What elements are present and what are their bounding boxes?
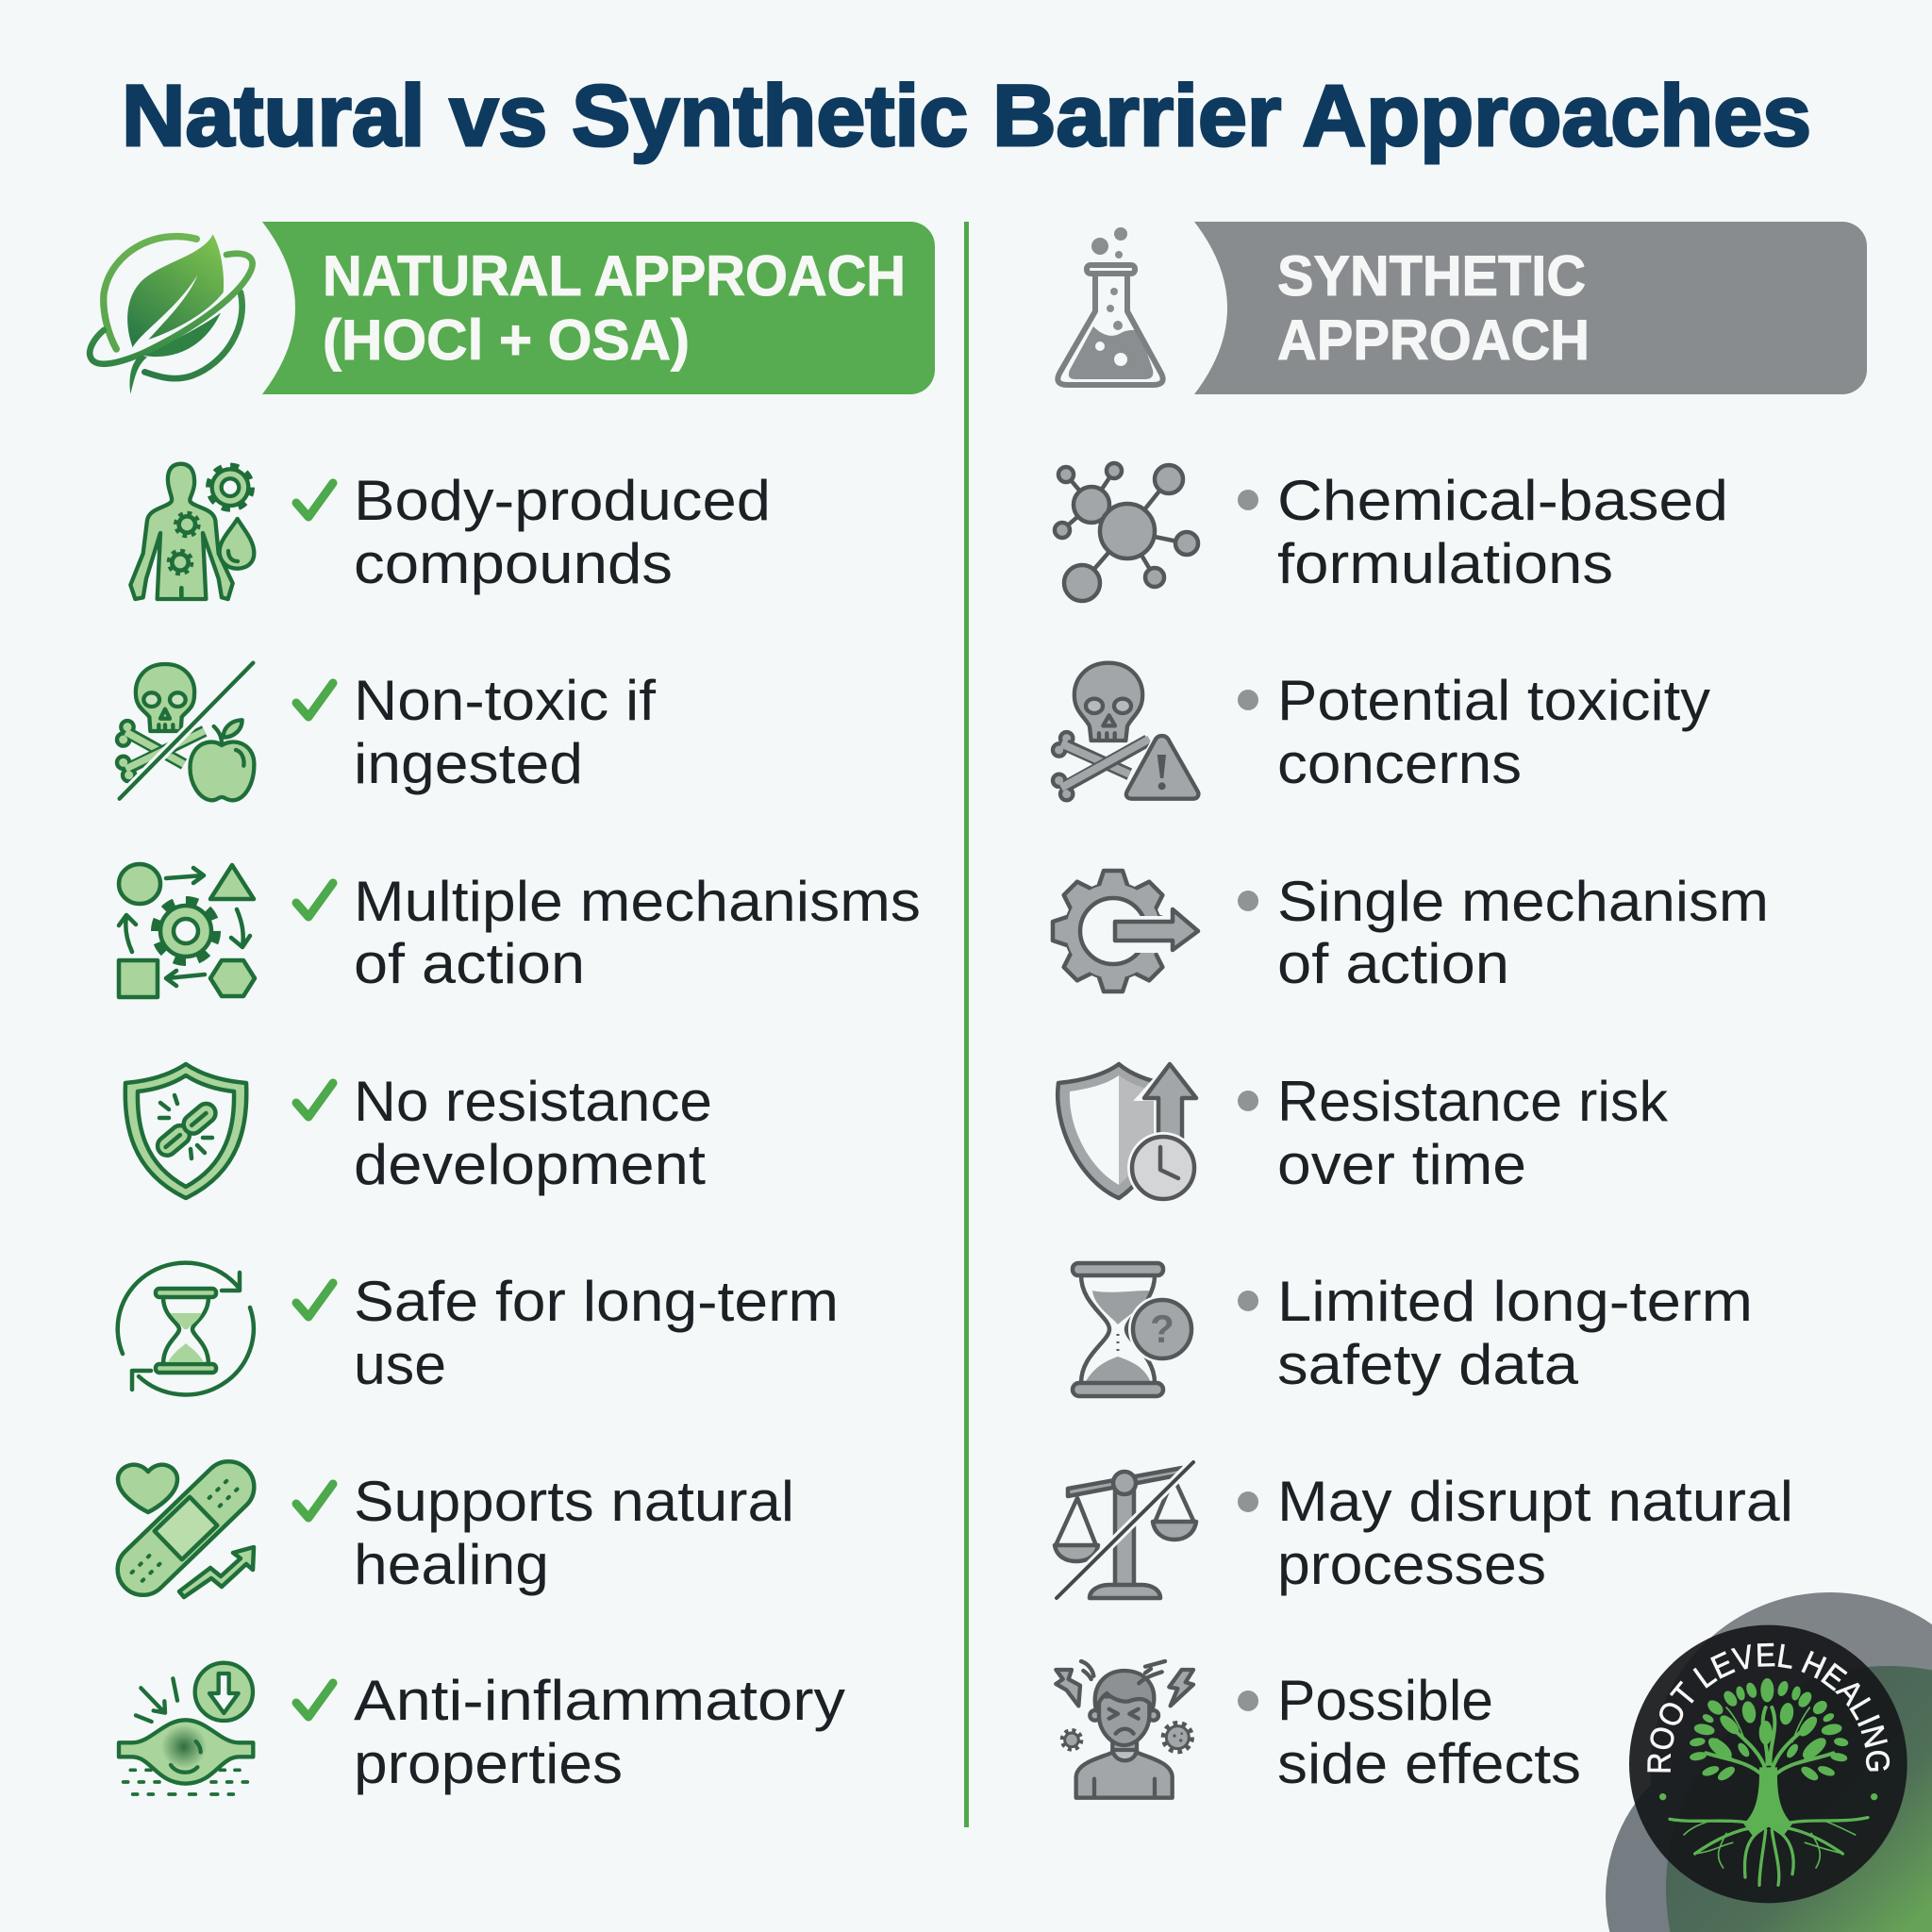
text	[1277, 669, 1710, 795]
check	[296, 1283, 333, 1317]
text	[1277, 870, 1769, 995]
bullet	[1238, 1091, 1258, 1111]
bullet	[1238, 1491, 1258, 1512]
row: limited data	[1073, 1263, 1753, 1396]
text: healing	[354, 1533, 549, 1596]
text: concerns	[1277, 732, 1522, 795]
text	[354, 669, 656, 795]
icon: shield broken link	[125, 1064, 246, 1198]
bullet	[1238, 490, 1258, 510]
text	[354, 870, 921, 995]
natural banner heading	[323, 244, 906, 372]
row: resistance risk	[1058, 1064, 1669, 1204]
synthetic banner heading: APPROACH	[1277, 308, 1590, 372]
natural banner heading: (HOCl + OSA)	[323, 308, 690, 372]
icon: hourglass question: ?	[1150, 1307, 1174, 1351]
text	[1277, 1070, 1669, 1196]
row: body-produced	[130, 464, 771, 599]
text: development	[354, 1133, 706, 1196]
text: side effects	[1277, 1732, 1581, 1795]
text: compounds	[354, 532, 673, 595]
check	[296, 1683, 333, 1717]
icon: gear with arrow	[1053, 871, 1198, 991]
icon: crossed skull and apple	[117, 663, 254, 800]
check	[296, 883, 333, 917]
row: chemical-based	[1055, 463, 1728, 601]
icon: leaf logo	[90, 234, 253, 394]
row: non-toxic	[117, 663, 656, 800]
icon: bandage heart arrow	[108, 1451, 264, 1606]
check	[296, 1083, 333, 1117]
icon: hourglass in cycle	[118, 1263, 254, 1394]
check	[296, 683, 333, 717]
bullet	[1238, 690, 1258, 710]
logo: root level healing	[1629, 1624, 1907, 1904]
row: safe long-term	[118, 1263, 839, 1396]
text: May disrupt natural	[1277, 1470, 1793, 1533]
icon: crossed scales	[1055, 1462, 1196, 1598]
text: Non-toxic if	[354, 669, 656, 732]
row: multiple mechanisms	[119, 864, 921, 997]
text	[354, 1070, 712, 1196]
panel: synthetic list	[1053, 463, 1793, 1798]
bullet	[1238, 1690, 1258, 1711]
text: properties	[354, 1732, 623, 1795]
logo tree	[1670, 1679, 1868, 1885]
title: Natural vs Synthetic Barrier Approaches	[122, 68, 1811, 164]
row: single mechanism	[1053, 870, 1769, 995]
panel: natural approach header	[90, 222, 935, 394]
text: Possible	[1277, 1669, 1493, 1732]
text: Multiple mechanisms	[354, 870, 921, 933]
text: Body-produced	[354, 469, 771, 532]
icon: shapes and gear cycle	[119, 864, 255, 997]
check	[296, 483, 333, 517]
text: Safe for long-term	[354, 1270, 839, 1333]
icon: hourglass question	[1073, 1263, 1196, 1396]
text	[1277, 1470, 1793, 1596]
bullet	[1238, 1291, 1258, 1311]
check	[296, 1484, 333, 1518]
synthetic banner heading	[1277, 244, 1590, 372]
synthetic banner	[1194, 222, 1867, 394]
text: Chemical-based	[1277, 469, 1728, 532]
row: disrupt processes	[1055, 1462, 1793, 1598]
text: processes	[1277, 1533, 1546, 1596]
icon: skull warning	[1053, 663, 1198, 800]
natural banner	[262, 222, 935, 394]
text: Single mechanism	[1277, 870, 1769, 933]
panel: natural list	[108, 464, 921, 1795]
text: of action	[1277, 932, 1509, 995]
text	[354, 1470, 794, 1596]
text: over time	[1277, 1133, 1526, 1196]
row: no resistance	[125, 1064, 712, 1198]
text	[1277, 469, 1728, 595]
text	[354, 1669, 845, 1795]
icon: reduced swelling	[119, 1663, 253, 1794]
icon: body with gears	[130, 464, 254, 599]
text: Limited long-term	[1277, 1270, 1753, 1333]
icon: flask	[1058, 227, 1163, 385]
icon: stressed person	[1056, 1661, 1193, 1798]
text	[1277, 1669, 1581, 1795]
text: No resistance	[354, 1070, 712, 1133]
text	[354, 469, 771, 595]
text: formulations	[1277, 532, 1613, 595]
center divider	[964, 222, 969, 1827]
text: use	[354, 1333, 446, 1396]
panel: synthetic approach header	[1058, 222, 1867, 394]
synthetic banner heading: SYNTHETIC	[1277, 244, 1586, 308]
text	[1277, 1270, 1753, 1396]
text: Anti-inflammatory	[354, 1669, 845, 1732]
logo ring text: ROOT LEVEL HEALING	[1647, 1643, 1890, 1772]
row: potential toxicity	[1053, 663, 1710, 800]
icon: molecule	[1055, 463, 1198, 601]
row: side effects	[1056, 1661, 1581, 1798]
natural banner heading: NATURAL APPROACH	[323, 244, 906, 308]
row: supports healing	[108, 1451, 794, 1606]
text: safety data	[1277, 1333, 1579, 1396]
text: Potential toxicity	[1277, 669, 1710, 732]
text: Supports natural	[354, 1470, 794, 1533]
text: of action	[354, 932, 585, 995]
text: ingested	[354, 732, 583, 795]
icon: shield clock arrow	[1058, 1064, 1200, 1204]
row: anti-inflammatory	[119, 1663, 845, 1795]
text	[354, 1270, 839, 1396]
bullet	[1238, 891, 1258, 911]
decorative circles behind logo	[1606, 1592, 1932, 1932]
text: Resistance risk	[1277, 1070, 1669, 1133]
